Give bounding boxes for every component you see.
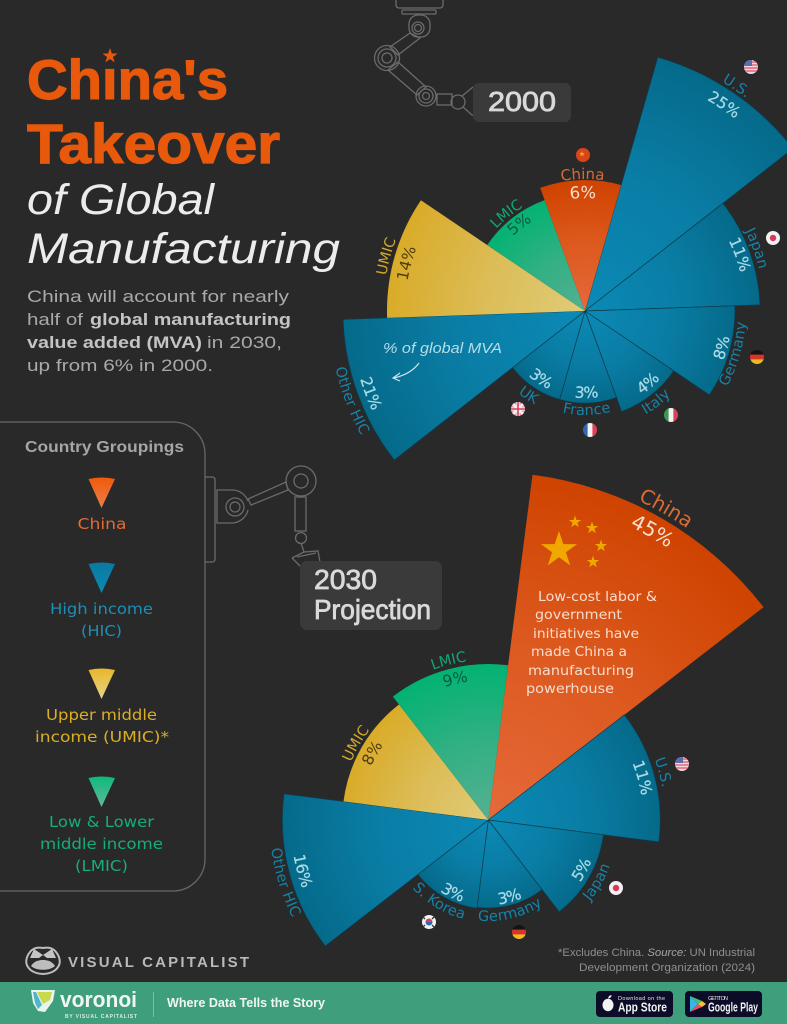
legend item: Low and lower middle income [40, 776, 163, 875]
flag: Japan [609, 881, 623, 895]
wedge: Germany 3% [478, 820, 542, 922]
logo: voronoi: BY VISUAL CAPITALIST [65, 1014, 137, 1020]
chart: 2030 polar chart [272, 474, 764, 946]
wedge: UMIC 14%: 14% [397, 248, 416, 280]
wedge: U.S. 25% [585, 57, 787, 310]
title star [102, 48, 118, 62]
wedge: UK 3%: UK [520, 386, 540, 404]
wedge: U.S. 25%: U.S. [724, 73, 747, 98]
wedge: U.S. 25%: 25% [708, 90, 740, 118]
callout: low-cost labor: powerhouse [526, 682, 614, 697]
callout: low-cost labor: government [535, 608, 622, 623]
wedge: U.S. 11%: U.S. [656, 757, 672, 786]
icon: voronoi mark [31, 990, 55, 1012]
badge: Google Play: GET IT ON [708, 996, 728, 1002]
wedge: China 45%: 45% [632, 516, 672, 546]
wedge: Germany 8% [586, 306, 748, 396]
wedge: France 3%: 3% [575, 386, 598, 398]
intro paragraph: in 2030, [207, 333, 282, 352]
legend item: High income: High income [50, 600, 153, 618]
title line: Takeover: Takeover [27, 112, 280, 175]
wordmark: VISUAL CAPITALIST [68, 954, 249, 971]
legend item: Low and lower middle income: (LMIC) [75, 857, 128, 875]
flag: UK [511, 402, 525, 416]
source note: Development Organization (2024) [579, 962, 755, 974]
wedge: U.S. 11% [488, 714, 672, 842]
wedge: Other HIC 21%: Other HIC [336, 367, 370, 434]
wedge: Other HIC 21%: 21% [360, 376, 382, 410]
wedge: Germany 3%: 3% [498, 888, 521, 904]
wedge: UK 3%: 3% [529, 368, 552, 388]
note: % of global MVA [383, 341, 502, 381]
flag: France [583, 423, 597, 437]
icon: play triangle [690, 996, 706, 1012]
title line: Manufacturing: Manufacturing [27, 225, 340, 273]
callout: low-cost labor: manufacturing [528, 664, 634, 679]
intro paragraph: up from 6% in 2000. [27, 356, 213, 375]
source note: *Excludes China. Source: UN Industrial [558, 947, 755, 959]
legend item: Upper middle income: income (UMIC)* [35, 728, 170, 746]
wedge: China 45% [488, 474, 764, 820]
logo: Visual Capitalist [26, 948, 249, 974]
wedge: Other HIC 16%: Other HIC [272, 848, 301, 917]
intro paragraph: half of [27, 310, 83, 329]
legend panel: country groupings [0, 422, 205, 891]
arrow: note to wedge [393, 363, 419, 381]
wedge: UMIC 8% [342, 704, 488, 820]
callout: low-cost labor: initiatives have [533, 627, 639, 642]
legend item: High income: (HIC) [81, 622, 122, 640]
flag: U.S. [675, 757, 689, 771]
wedge: UMIC 8%: 8% [362, 742, 382, 764]
tagline: Where Data Tells the Story [167, 996, 325, 1010]
year label: 2000 [473, 83, 571, 122]
wedge: Italy 4%: 4% [639, 372, 659, 392]
chart: 2000 polar chart [336, 57, 787, 497]
wedge: UMIC 8%: UMIC [342, 724, 368, 760]
footer bar [0, 982, 787, 1024]
wedge: U.S. 11%: 11% [632, 760, 652, 795]
wedge: S. Korea 3%: 3% [441, 882, 464, 902]
wedge: Japan 5% [489, 820, 610, 912]
icon: apple [602, 995, 614, 1011]
icon: China flag stars [541, 516, 607, 567]
wedge: Japan 5%: 5% [571, 859, 591, 882]
wedge: Italy 4%: Italy [641, 390, 669, 414]
wedge: LMIC 5%: 5% [506, 214, 530, 235]
intro paragraph: global manufacturing [90, 310, 291, 329]
flags: 2000 chart [511, 60, 780, 437]
wedge: China 45%: China [641, 490, 690, 528]
wedge: China 6%: 6% [570, 186, 596, 199]
badge: App Store [596, 991, 673, 1017]
legend item: China [78, 478, 126, 533]
wedge: LMIC 5% [487, 199, 585, 311]
wedge: LMIC 9%: 9% [443, 670, 467, 686]
callout: low-cost labor: Low-cost labor & [538, 590, 657, 605]
wedge: Other HIC 16% [272, 794, 488, 946]
wedge: LMIC 9%: LMIC [430, 651, 466, 670]
legend item: China: China [78, 515, 126, 533]
flag: China [576, 148, 590, 162]
flag: U.S. [744, 60, 758, 74]
robot arm: 2030 [205, 466, 320, 566]
wedge: Italy 4% [586, 312, 674, 414]
wedge: China 6% [540, 168, 622, 311]
title [27, 48, 340, 273]
flag: Japan [766, 231, 780, 245]
wedge: France 3% [560, 312, 617, 416]
icon: Visual Capitalist mark [26, 948, 60, 974]
wedge: Japan 11%: Japan [742, 227, 766, 268]
intro paragraph: value added (MVA) [27, 333, 202, 352]
legend item: Low and lower middle income: Low & Lower [49, 813, 155, 831]
wedge: S. Korea 3% [413, 820, 488, 919]
wedge: Other HIC 21% [336, 311, 584, 460]
wedge: Other HIC 16%: 16% [294, 854, 312, 888]
wedge: LMIC 5%: LMIC [490, 199, 522, 228]
legend heading: Country Groupings [25, 439, 184, 456]
wedge: S. Korea 3%: S. Korea [413, 882, 464, 919]
wedge: Germany 8%: Germany [719, 322, 748, 385]
year label: 2030 Projection: Projection [314, 594, 431, 625]
wedge: UK 3% [512, 312, 585, 404]
year label: 2030 Projection: 2030 [314, 564, 377, 595]
legend item: High income [50, 562, 153, 640]
wedge: China 6%: China [561, 168, 604, 180]
year label: 2000: 2000 [488, 86, 556, 117]
flag: South Korea [422, 915, 436, 929]
logo: voronoi [31, 987, 137, 1020]
legend item: Upper middle income: Upper middle [46, 706, 157, 724]
year label: 2030 Projection [300, 561, 442, 630]
flags: 2030 chart [422, 757, 689, 939]
badge: Google Play [685, 991, 762, 1017]
badge: App Store: Download on the [618, 996, 665, 1002]
callout: low-cost labor: made China a [531, 645, 627, 660]
wedge: LMIC 9% [393, 651, 508, 820]
intro paragraph [27, 287, 291, 375]
robot arm: 2000 [374, 0, 478, 116]
wedge: UMIC 14%: UMIC [376, 237, 396, 274]
wedge: Germany 3%: Germany [478, 898, 540, 922]
legend item: Low and lower middle income: middle income [40, 835, 163, 853]
legend item: Upper middle income [35, 668, 170, 746]
badge: App Store: App Store [618, 1000, 667, 1014]
flag: Italy [664, 408, 678, 422]
wedge: UMIC 14% [376, 200, 585, 318]
source note [558, 947, 755, 974]
wedge: Japan 11% [586, 203, 766, 310]
title line: of Global: of Global [27, 176, 216, 224]
wedge: Japan 5%: Japan [582, 864, 610, 904]
flag: Germany [512, 925, 526, 939]
badge: Google Play: Google Play [708, 1000, 758, 1014]
intro paragraph: China will account for nearly [27, 287, 290, 306]
callout: low-cost labor [526, 590, 657, 697]
logo: voronoi: voronoi [60, 987, 137, 1012]
flag: Germany [750, 350, 764, 364]
note: % of global MVA: % of global MVA [383, 341, 502, 357]
title line: China's: China's [27, 48, 228, 111]
wedge: Germany 8%: 8% [714, 337, 730, 360]
wedge: France 3%: France [564, 402, 610, 416]
wedge: Japan 11%: 11% [729, 237, 751, 272]
